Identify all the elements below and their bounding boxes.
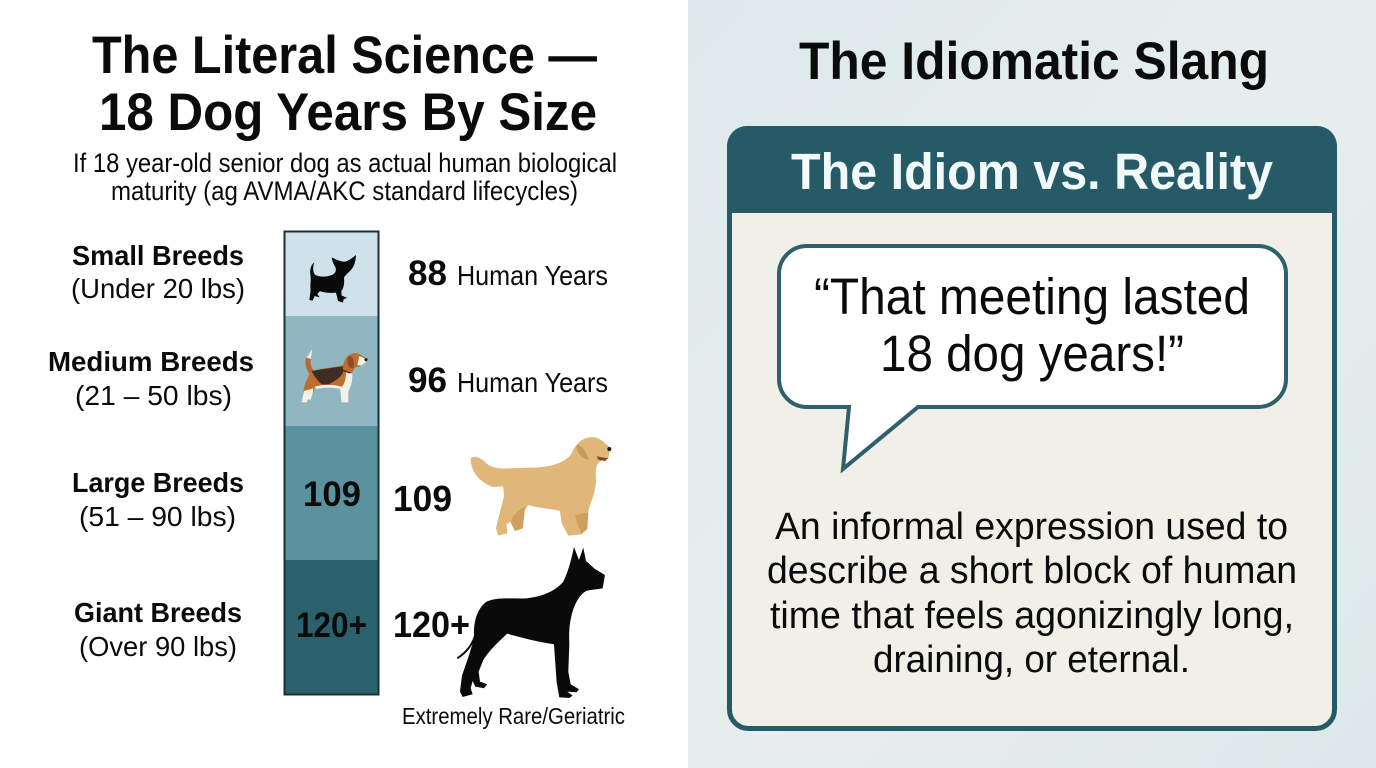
title: literal science: 18 Dog Years By Size bbox=[99, 83, 597, 142]
icon: great dane bbox=[457, 547, 605, 698]
value: 96 human years: Human Years bbox=[457, 367, 608, 398]
card header bbox=[727, 126, 1337, 213]
definition text: describe a short block of human bbox=[767, 550, 1297, 592]
definition text: draining, or eternal. bbox=[873, 639, 1190, 681]
label: medium breeds bbox=[48, 346, 254, 411]
icon: golden retriever bbox=[471, 437, 612, 536]
value: 96 human years: 96 bbox=[408, 361, 447, 400]
label: large breeds: (51 – 90 lbs) bbox=[79, 501, 236, 532]
definition text: An informal expression used to bbox=[775, 506, 1288, 548]
label: small breeds: (Under 20 lbs) bbox=[71, 273, 245, 304]
label: small breeds bbox=[71, 240, 245, 304]
definition text bbox=[767, 506, 1297, 681]
caption: extremely rare: Extremely Rare/Geriatric bbox=[402, 703, 625, 729]
value: 88 human years: Human Years bbox=[457, 260, 608, 291]
value: 109: 109 bbox=[393, 478, 452, 519]
label: medium breeds: (21 – 50 lbs) bbox=[75, 380, 232, 411]
stacked lifespan bar: 109 bbox=[303, 475, 361, 514]
subtitle bbox=[73, 148, 617, 206]
value: 120+: 120+ bbox=[393, 604, 470, 645]
label: large breeds bbox=[72, 467, 244, 532]
panel: the idiomatic slang bbox=[688, 0, 1376, 768]
title: literal science bbox=[92, 26, 597, 142]
definition text: time that feels agonizingly long, bbox=[770, 595, 1294, 637]
label: giant breeds: (Over 90 lbs) bbox=[79, 631, 237, 662]
subtitle: If 18 year-old senior dog as actual human biological bbox=[73, 148, 617, 178]
speech bubble: 18 dog years!” bbox=[880, 325, 1184, 382]
subtitle: maturity (ag AVMA/AKC standard lifecycles) bbox=[111, 176, 578, 206]
speech bubble bbox=[779, 246, 1286, 469]
icon: beagle bbox=[302, 349, 367, 402]
card: idiom vs reality bbox=[727, 126, 1337, 728]
label: giant breeds: Giant Breeds bbox=[74, 597, 242, 628]
label: giant breeds bbox=[74, 597, 242, 662]
stacked lifespan bar: 120+ bbox=[296, 606, 367, 645]
value: 88 human years bbox=[408, 254, 608, 293]
speech bubble: “That meeting lasted bbox=[814, 268, 1250, 325]
panel: the literal science bbox=[48, 26, 625, 729]
title: literal science: The Literal Science — bbox=[92, 26, 597, 85]
icon: chihuahua bbox=[309, 255, 356, 303]
label: medium breeds: Medium Breeds bbox=[48, 346, 254, 377]
label: large breeds: Large Breeds bbox=[72, 467, 244, 498]
value: 96 human years bbox=[408, 361, 608, 400]
stacked lifespan bar bbox=[284, 232, 378, 694]
value: 88 human years: 88 bbox=[408, 254, 447, 293]
card header: The Idiom vs. Reality bbox=[791, 143, 1274, 200]
label: small breeds: Small Breeds bbox=[72, 240, 244, 271]
title: idiomatic slang: The Idiomatic Slang bbox=[799, 32, 1269, 91]
